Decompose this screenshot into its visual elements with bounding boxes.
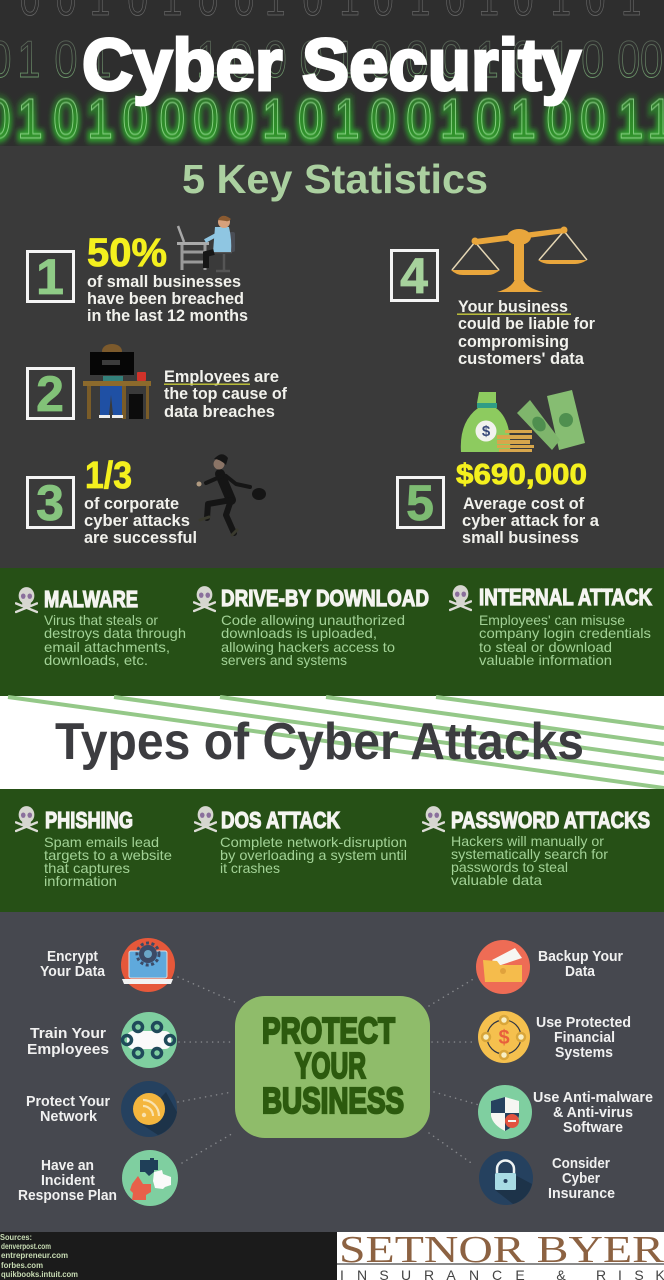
description: internal attack: to steal or download <box>479 639 612 655</box>
description: dos attack: Complete network-disruption <box>220 834 407 850</box>
description: malware: downloads, etc. <box>44 652 148 668</box>
description: password attacks: Hackers will manually or <box>451 833 604 849</box>
icon: skull <box>16 587 37 612</box>
heading: types of cyber attacks: Types of Cyber Attacks <box>55 713 584 771</box>
label: consider cyber insurance: Insurance <box>548 1185 615 1202</box>
stat text 4: customers' data <box>458 350 585 368</box>
icon: thief <box>196 454 266 535</box>
description: drive-by download <box>221 612 405 668</box>
label: have an incident response plan <box>18 1157 117 1204</box>
footer: setnor byer logo: SETNOR BYER <box>339 1229 664 1271</box>
footer: sources: Sources: <box>0 1233 32 1242</box>
stat text 4: compromising <box>458 333 569 351</box>
stat 5 <box>398 390 600 547</box>
description: internal attack: company login credentials <box>479 625 651 641</box>
description: password attacks: systematically search for <box>451 846 608 862</box>
description: dos attack <box>220 834 407 876</box>
label: backup your data: Data <box>565 963 596 980</box>
number box 2: 2 <box>36 366 64 422</box>
description: drive-by download: allowing hackers access to <box>221 639 395 655</box>
stat text 2 <box>164 368 287 421</box>
label: have an incident response plan: Response Plan <box>18 1187 117 1204</box>
description: dos attack: by overloading a system until <box>220 847 407 863</box>
label: train your employees <box>27 1025 109 1058</box>
icon: skull <box>195 806 216 831</box>
label: protect your network: Network <box>40 1108 98 1125</box>
label: use anti-malware and anti-virus software <box>533 1089 653 1136</box>
footer: setnor byer logo <box>337 1229 664 1280</box>
description: password attacks: valuable data <box>451 872 542 888</box>
heading: dos attack: DOS ATTACK <box>221 807 340 833</box>
central badge: YOUR <box>295 1045 366 1086</box>
number box 3: 3 <box>36 475 64 531</box>
heading: drive-by download: DRIVE-BY DOWNLOAD <box>221 585 429 611</box>
stat 3 <box>28 454 266 547</box>
description: password attacks: passwords to steal <box>451 859 568 875</box>
stat text 1: have been breached <box>87 290 244 308</box>
description: malware <box>44 612 186 668</box>
description: malware: destroys data through <box>44 625 186 641</box>
footer: sources: denverpost.com <box>1 1242 51 1251</box>
label: backup your data: Backup Your <box>538 948 623 965</box>
label: backup your data <box>538 948 623 980</box>
panel: types of cyber attacks banner <box>0 696 664 789</box>
central badge: PROTECT <box>262 1010 395 1051</box>
attack: password attacks <box>423 806 650 888</box>
stat text 3: cyber attacks <box>84 512 190 530</box>
panel: attack types row 2 <box>0 789 664 912</box>
label: train your employees: Train Your <box>30 1025 106 1042</box>
number box 1: 1 <box>36 249 64 305</box>
number box 2 <box>28 366 74 422</box>
stat value 50%: 50% <box>87 231 167 275</box>
panel: key statistics <box>0 146 664 568</box>
stat text 2: are <box>254 368 279 386</box>
stat text 2: data breaches <box>164 403 275 421</box>
stat text 3 <box>84 495 197 547</box>
label: use protected financial systems: Systems <box>555 1044 613 1061</box>
description: malware: email attachments, <box>44 639 170 655</box>
footer: sources <box>0 1232 337 1280</box>
number box 4 <box>392 248 438 304</box>
attack: dos attack <box>195 806 407 876</box>
label: encrypt your data: Your Data <box>40 963 106 980</box>
stat text 5 <box>462 495 600 547</box>
number box 4: 4 <box>400 248 428 304</box>
label: protect your network: Protect Your <box>26 1093 110 1110</box>
label: train your employees: Employees <box>27 1041 109 1058</box>
icon: cyber insurance lock <box>479 1151 533 1205</box>
label: use anti-malware and anti-virus software: & Anti-virus <box>553 1104 633 1121</box>
attack: phishing <box>16 806 172 889</box>
icon: protected financial systems: $ <box>498 1027 510 1049</box>
label: protect your network <box>26 1093 110 1125</box>
label: encrypt your data: Encrypt <box>47 948 98 965</box>
description: phishing: Spam emails lead <box>44 834 159 850</box>
stat text 1: in the last 12 months <box>87 307 248 325</box>
label: encrypt your data <box>40 948 106 980</box>
stat text 1: of small businesses <box>87 273 241 291</box>
description: internal attack: Employees' can misuse <box>479 612 625 628</box>
title: Cyber Security <box>82 25 581 106</box>
description: malware: Virus that steals or <box>44 612 158 628</box>
panel: attack types row 1 <box>0 568 664 696</box>
description: phishing <box>44 834 172 889</box>
description: password attacks <box>451 833 608 888</box>
icon: skull <box>16 806 37 831</box>
central badge: BUSINESS <box>262 1080 404 1121</box>
panel: header <box>0 0 664 151</box>
label: have an incident response plan: Incident <box>41 1172 95 1189</box>
icon: money bag and bills: $ <box>482 423 491 440</box>
description: drive-by download: downloads is uploaded, <box>221 625 377 641</box>
icon: protected financial systems <box>478 1011 530 1063</box>
icon: train employees <box>121 1012 177 1068</box>
icon: protect network wifi <box>121 1081 177 1137</box>
stat text 4: Your business <box>458 298 568 316</box>
label: have an incident response plan: Have an <box>41 1157 94 1174</box>
label: use anti-malware and anti-virus software: Use Anti-malware <box>533 1089 653 1106</box>
stat text 3: are successful <box>84 529 197 547</box>
label: consider cyber insurance: Consider <box>552 1155 610 1172</box>
description: phishing: targets to a website <box>44 847 172 863</box>
icon: anti-malware shield <box>478 1085 532 1139</box>
label: use protected financial systems <box>536 1014 631 1061</box>
label: use protected financial systems: Use Protected <box>536 1014 631 1031</box>
attack: malware <box>16 586 186 668</box>
stat 4 <box>392 226 596 368</box>
heading: 5 key statistics: 5 Key Statistics <box>182 156 488 202</box>
stat value 1/3: 1/3 <box>85 455 132 497</box>
number box 5: 5 <box>406 475 434 531</box>
stat text 3: of corporate <box>84 495 179 513</box>
central badge <box>235 996 430 1138</box>
icon: skull <box>423 806 444 831</box>
stat text 2: the top cause of <box>164 385 287 403</box>
description: internal attack: valuable information <box>479 652 612 668</box>
stat 2 <box>28 344 287 422</box>
icon: backup folder <box>476 940 530 994</box>
number box 3 <box>28 475 74 531</box>
description: phishing: that captures <box>44 860 130 876</box>
number box 1 <box>28 249 74 305</box>
icon: skull <box>194 586 215 611</box>
description: phishing: information <box>44 873 117 889</box>
label: use anti-malware and anti-virus software: Software <box>563 1119 623 1136</box>
description: drive-by download: Code allowing unauthorized <box>221 612 405 628</box>
icon: person at desk <box>177 216 235 271</box>
stat text 5: cyber attack for a <box>462 512 600 530</box>
footer: sources: entrepreneur.com <box>1 1251 68 1260</box>
heading: malware: MALWARE <box>44 586 138 612</box>
connector lines <box>178 977 479 1165</box>
attack: drive-by download <box>194 585 429 668</box>
stat text 1 <box>87 273 248 325</box>
stat text 5: small business <box>462 529 579 547</box>
icon: encrypt laptop <box>121 938 175 992</box>
icon: scales <box>451 226 587 292</box>
icon: skull <box>450 585 471 610</box>
stat text 5: Average cost of <box>463 495 584 513</box>
icon: incident plan puzzle <box>122 1150 178 1206</box>
attack: internal attack <box>450 584 652 668</box>
stat 1 <box>28 216 248 325</box>
description: dos attack: it crashes <box>220 860 280 876</box>
panel: protect your business <box>0 912 664 1232</box>
heading: phishing: PHISHING <box>45 807 133 833</box>
stat value $690,000: $690,000 <box>456 459 587 491</box>
description: drive-by download: servers and systems <box>221 652 347 668</box>
footer: sources: quikbooks.intuit.com <box>1 1270 78 1279</box>
stat text 2: Employees <box>164 368 250 386</box>
icon: money bag and bills <box>461 390 585 452</box>
label: consider cyber insurance: Cyber <box>562 1170 600 1187</box>
icon: employee at computer <box>83 344 151 419</box>
label: use protected financial systems: Financial <box>554 1029 615 1046</box>
description: internal attack <box>479 612 651 668</box>
label: consider cyber insurance <box>548 1155 615 1202</box>
footer: sources: forbes.com <box>1 1261 43 1270</box>
stat text 4: could be liable for <box>458 315 596 333</box>
number box 5 <box>398 475 444 531</box>
stat text 4 <box>457 298 596 368</box>
